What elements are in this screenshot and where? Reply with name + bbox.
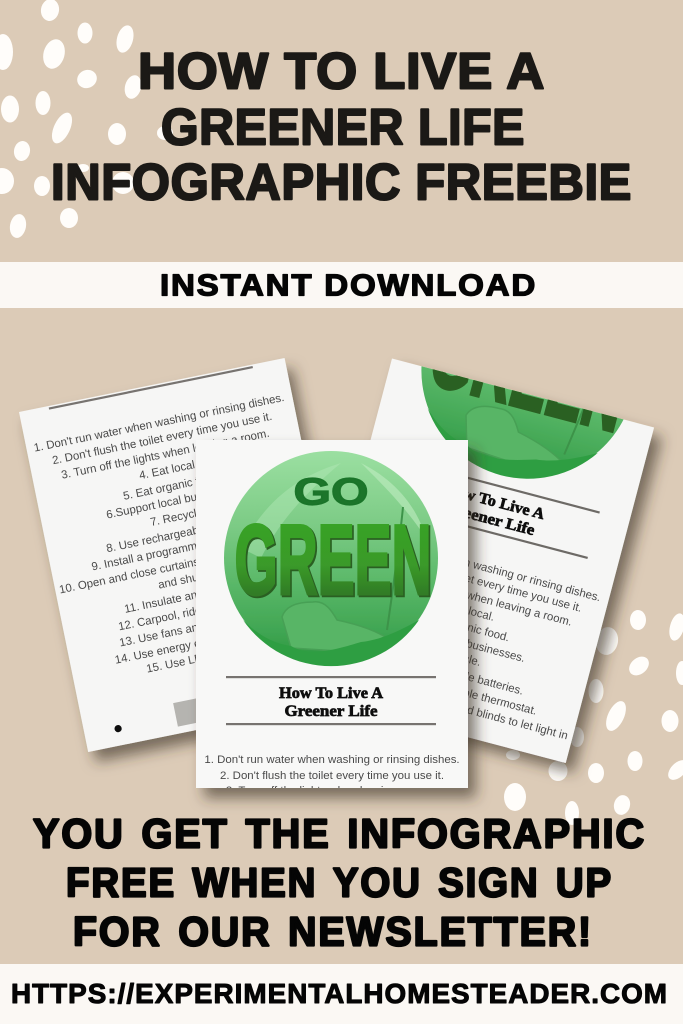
panel: center front page (196, 440, 468, 797)
panel: right tilted page (370, 358, 670, 781)
list of green tips: 7. Recycle. (424, 643, 482, 669)
call to action text (33, 810, 646, 954)
list of green tips: 2. Don't flush the toilet every time you use it. (51, 411, 273, 467)
heading: Greener Life (442, 499, 537, 539)
title (51, 42, 632, 210)
heading: Greener Life (284, 703, 378, 720)
list of green tips: 10. Open and close curtains and blinds to let light in (58, 532, 317, 596)
GREEN wordmark: GREEN (234, 504, 432, 615)
list of green tips (30, 391, 336, 689)
list of green tips: 6.Support local businesses. (105, 482, 245, 522)
list of green tips: and shut out. (157, 567, 224, 592)
list of green tips: 3. Turn off the lights when leaving a room. (226, 785, 438, 797)
globe cropped at top of page (421, 366, 624, 479)
banner: instant download: INSTANT DOWNLOAD (160, 268, 537, 302)
list of green tips: 5. Eat organic food. (122, 471, 222, 503)
title: GREENER LIFE (161, 98, 525, 156)
title: HOW TO LIVE A (138, 42, 545, 100)
heading: How To Live A (441, 480, 547, 523)
list of green tips: 15. Use LED light bulbs. (145, 639, 268, 676)
GREEN wordmark: GREEN (236, 506, 433, 616)
list of green tips: 14. Use energy efficient appliances. (114, 619, 294, 667)
list of green tips: 1. Don't run water when washing or rinsing dishes. (204, 754, 460, 766)
GREEN wordmark (234, 504, 433, 616)
list of green tips: 1. Don't run water when washing or rinsing dishes. (352, 528, 602, 604)
photo thumbnail (173, 695, 217, 727)
bullet (114, 724, 122, 733)
call to action text: YOU GET THE INFOGRAPHIC (33, 810, 646, 856)
list of green tips: 1. Don't run water when washing or rinsing dishes. (33, 392, 285, 455)
list of green tips: 11. Insulate and weatherize. (123, 576, 265, 616)
list of green tips: 4. Eat local. (435, 597, 496, 624)
list of green tips: 4. Eat local. (138, 459, 199, 482)
list of green tips (205, 755, 458, 788)
list of green tips: 2. Don't flush the toilet every time you use it. (220, 770, 444, 782)
list of green tips: 13. Use fans and open windows. (118, 605, 283, 649)
decorative dots: lower right (504, 610, 683, 825)
heading (437, 480, 547, 541)
heading: How To Live A (279, 685, 384, 702)
list of green tips: 8. Use rechargeable batteries. (373, 647, 525, 698)
heading (279, 685, 384, 720)
list of green tips: 7. Recycle. (149, 506, 207, 529)
list of green tips: 9. Install a programmable thermostat. (352, 658, 538, 718)
list of green tips: 3. Turn off the lights when leaving a room. (60, 428, 271, 482)
list of green tips: 8. Use rechargeable batteries. (105, 513, 258, 555)
icon: go green globe: GO (294, 472, 368, 514)
list of green tips (309, 527, 605, 757)
list of green tips: and shut out. (403, 704, 471, 732)
banner: instant download (0, 262, 683, 308)
list of green tips: 10. Open and close curtains and blinds to let light in (313, 664, 569, 742)
list of green tips: 5. Eat organic food. (412, 607, 511, 644)
list of green tips: 9. Install a programmable thermostat. (91, 524, 279, 573)
list of green tips: 6.Support local businesses. (388, 618, 526, 665)
panel: left tilted page (19, 358, 354, 752)
call to action text: FOR OUR NEWSLETTER! (73, 908, 593, 954)
list of green tips: 3. Turn off the lights when leaving a room. (365, 563, 573, 629)
footer banner: website url (0, 964, 683, 1024)
icon: go green globe (224, 451, 438, 666)
list of green tips: 2. Don't flush the toilet every time you use it. (363, 546, 583, 615)
title: INFOGRAPHIC FREEBIE (51, 154, 632, 210)
decorative dots: top left (0, 0, 173, 239)
list of green tips: 12. Carpool, ride a bike or walk. (117, 590, 277, 633)
call to action text: FREE WHEN YOU SIGN UP (66, 860, 613, 906)
footer banner: website url: HTTPS://EXPERIMENTALHOMESTEADER.COM (11, 978, 668, 1009)
